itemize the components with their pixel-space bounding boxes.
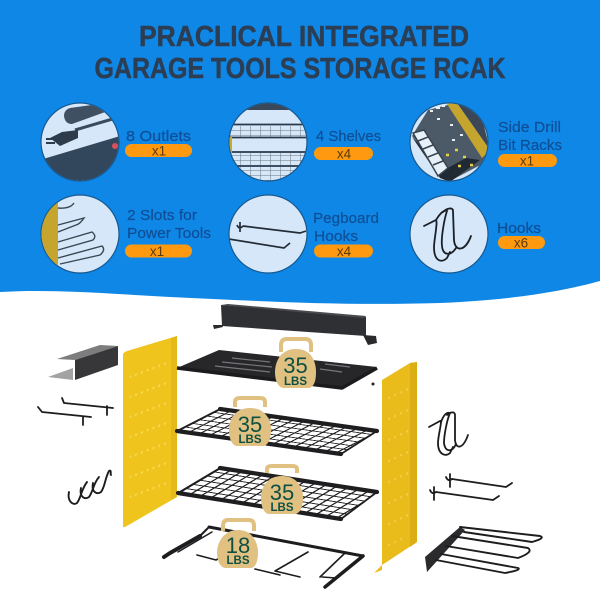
right yellow pegboard panel [374,362,417,573]
quantity pill: x1 [150,244,164,259]
quantity pill [125,144,192,158]
power tool shelf [164,527,363,587]
left yellow pegboard panel [123,336,177,527]
title: GARAGE TOOLS STORAGE RCAK [94,53,506,85]
label [127,208,211,242]
weight badge: 18 lbs bottom shelf [217,520,258,568]
icon: wire shelves [228,103,308,183]
weight badge: 18 lbs bottom shelf: LBS [226,555,250,567]
feature: 2 slots for power tools [40,195,211,275]
weight badge: 35 lbs top shelf: LBS [284,376,307,388]
feature: hooks [410,195,545,273]
icon: pegboard hooks [229,195,307,273]
quantity pill [314,146,373,162]
feature: pegboard hooks [229,195,379,273]
feature: 8 outlets [40,103,192,185]
weight badge: 35 lbs third shelf [261,466,303,514]
label [498,120,562,154]
icon: power tool slots [40,195,119,275]
power strip [213,304,377,345]
weight badge: 35 lbs third shelf: 35 [270,480,294,505]
quantity pill [498,154,557,168]
label [313,211,379,245]
quantity pill: x6 [514,236,528,250]
top solid shelf [177,350,377,388]
icon: power strip [40,103,120,185]
weight badge: 35 lbs second shelf: LBS [238,434,262,446]
title: PRACLICAL INTEGRATED [139,21,469,53]
S hooks [69,471,111,504]
quantity pill: x4 [337,146,352,162]
label: Pegboard [313,211,379,227]
weight badge: 35 lbs second shelf: 35 [238,412,262,437]
label: Hooks [314,229,358,245]
icon: hooks [410,195,488,273]
quantity pill [125,244,192,259]
weight badge: 18 lbs bottom shelf: 18 [226,533,250,558]
label: Bit Racks [498,138,562,154]
label: Side Drill [498,120,561,136]
label: Power Tools [127,226,211,242]
quantity pill: x1 [152,144,166,158]
label: Hooks [497,221,541,237]
icon: drill rack [410,103,490,182]
small screw [372,382,374,386]
title [94,21,506,85]
wire shelf 3 [178,468,377,519]
label: 2 Slots for [127,208,197,224]
right hooks [429,412,468,455]
feature: side drill bit racks [410,103,562,182]
label: 8 Outlets [126,129,191,145]
power tool rack [425,527,542,573]
feature: 4 shelves [228,103,381,183]
quantity pill: x4 [337,244,352,259]
right pegboard hooks [430,474,512,500]
weight badge: 35 lbs top shelf: 35 [283,353,308,378]
weight badge: 35 lbs top shelf [275,339,316,388]
side drill bit rack [48,345,118,380]
wire shelf 2 [177,409,377,454]
weight badge: 35 lbs second shelf [229,398,271,446]
quantity pill [314,244,373,259]
weight badge: 35 lbs third shelf: LBS [270,502,294,514]
quantity pill: x1 [520,154,534,168]
left pegboard hooks [38,398,113,425]
blue header background [0,0,600,304]
label: 4 Shelves [316,129,381,145]
